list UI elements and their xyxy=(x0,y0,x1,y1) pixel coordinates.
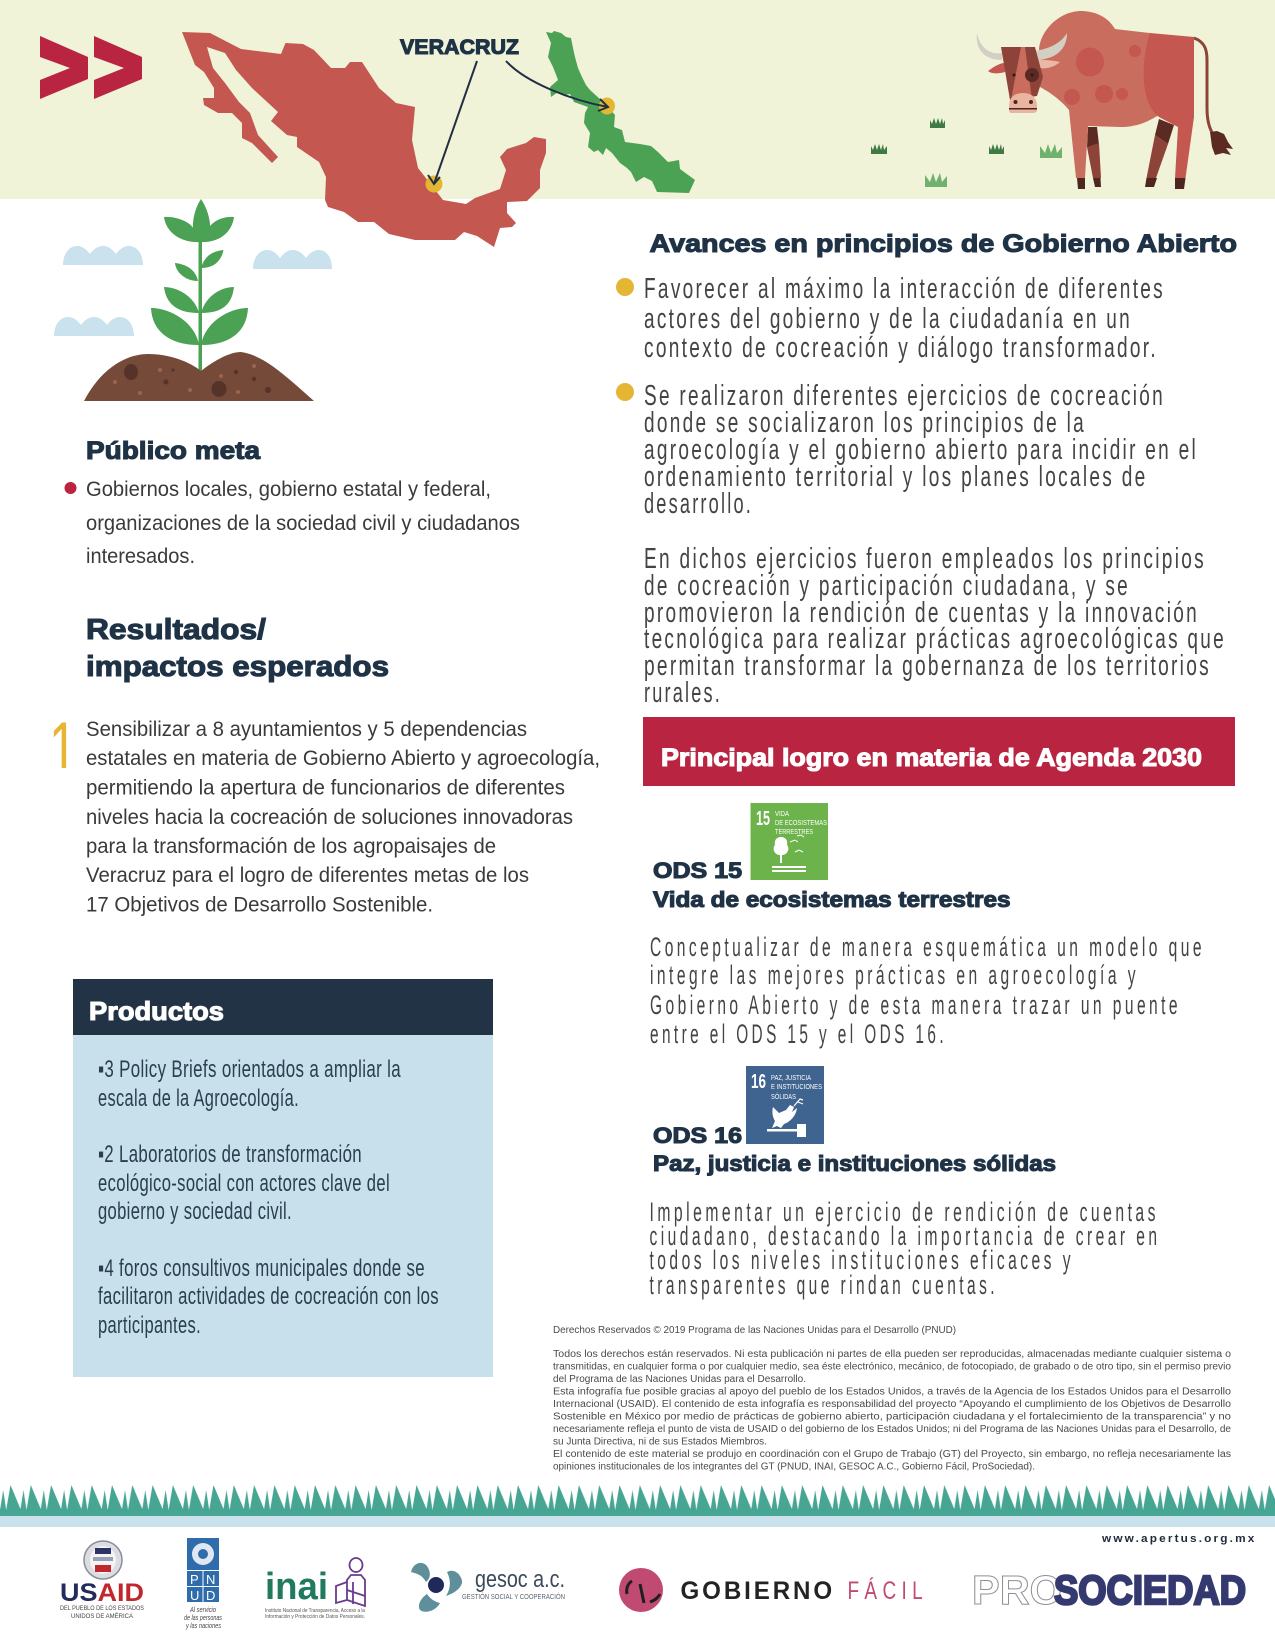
text: expected result: niveles hacia la cocreación de soluciones innovadoras xyxy=(86,806,573,829)
heading: Resultados / impactos esperados: impactos esperados xyxy=(86,651,389,683)
product list: ecológico-social con actores clave del xyxy=(98,1170,390,1197)
illustration: cow xyxy=(977,11,1233,189)
legal text: Todos los derechos están reservados. Ni esta publicación ni partes de ella pueden ser reproducidas, almacenadas mediante cualquier sistema o xyxy=(553,1349,1231,1360)
logo: PNUD: U xyxy=(190,1588,199,1603)
heading: Público meta: Público meta xyxy=(86,437,261,465)
text: ODS 15 description: entre el ODS 15 y el ODS 16. xyxy=(650,1019,947,1049)
icon: SDG 15 tile: TERRESTRES xyxy=(775,829,813,836)
text: target audience: Gobiernos locales, gobierno estatal y federal, xyxy=(86,478,491,501)
icon: SDG 15 tile: 15 xyxy=(756,808,770,830)
legal text: El contenido de este material se produjo en coordinación con el Grupo de Trabajo (GT) del Proyecto, sin embargo, no refleja necesariamente las xyxy=(553,1449,1231,1460)
logo: GESOC: gesoc a.c. xyxy=(475,1566,565,1593)
icon: SDG 16 tile: E INSTITUCIONES xyxy=(771,1084,822,1091)
legal text: transmitidas, en cualquier forma o por cualquier medio, sea éste electrónico, mecánico, de fotocopiado, de grabado o de otro tipo, sin el permiso previo xyxy=(553,1362,1231,1372)
arrow to Mexico map xyxy=(428,61,477,184)
header band xyxy=(0,0,1275,199)
legal text: del Programa de las Naciones Unidas para el Desarrollo. xyxy=(553,1374,806,1385)
label: ODS 16: ODS 16 xyxy=(653,1123,742,1148)
text: expected result: estatales en materia de Gobierno Abierto y agroecología, xyxy=(86,747,600,770)
text: expected result: 17 Objetivos de Desarrollo Sostenible. xyxy=(86,894,433,916)
panel: Productos xyxy=(73,979,493,1377)
text: first principle xyxy=(644,273,1165,364)
banner: Principal logro en materia de Agenda 2030: Principal logro en materia de Agenda 2030 xyxy=(661,744,1202,772)
legal text: su Junta Directiva, ni de sus Estados Miembros. xyxy=(553,1436,767,1448)
icon: SDG 16 tile: PAZ, JUSTICIA xyxy=(771,1075,811,1082)
product list: gobierno y sociedad civil. xyxy=(98,1198,292,1225)
logo: USAID: DEL PUEBLO DE LOS ESTADOS xyxy=(60,1605,145,1612)
logo: USAID xyxy=(60,1541,145,1620)
logo: ProSociedad: PRO xyxy=(972,1567,1062,1613)
logo: ProSociedad: SOCIEDAD xyxy=(1054,1567,1246,1613)
text: expected result: Veracruz para el logro de diferentes metas de los xyxy=(86,864,529,887)
grass band xyxy=(0,1485,1275,1527)
heading: Resultados / impactos esperados: Resultados/ xyxy=(86,614,266,646)
label: ODS 15: ODS 15 xyxy=(653,858,742,883)
panel heading: Productos xyxy=(89,996,224,1026)
product list: facilitaron actividades de cocreación con los xyxy=(98,1283,439,1310)
icon: SDG 16 tile: SÓLIDAS xyxy=(771,1092,796,1101)
arrow to Veracruz map xyxy=(506,61,608,111)
bullets: yellow dots xyxy=(616,278,634,401)
legal text: Derechos Reservados © 2019 Programa de las Naciones Unidas para el Desarrollo (PNUD) xyxy=(553,1325,956,1336)
product list xyxy=(98,1056,439,1339)
text: expected result xyxy=(86,718,600,916)
text: target audience xyxy=(86,478,520,568)
text: target audience: interesados. xyxy=(86,545,195,568)
logo: PNUD xyxy=(184,1538,222,1630)
logo: GESOC xyxy=(411,1563,565,1612)
text: ODS 16 description xyxy=(650,1197,1160,1300)
legal text: necesariamente refleja el punto de vista de USAID o del gobierno de los Estados Unidos; ni del Programa de las Naciones Unidas para el Desarrollo, de xyxy=(553,1424,1231,1435)
product list: participantes. xyxy=(98,1312,201,1339)
icon: double chevron xyxy=(40,36,142,99)
location markers xyxy=(426,98,615,192)
legal text: Esta infografía fue posible gracias al apoyo del pueblo de los Estados Unidos, a través de la Agencia de los Estados Unidos para el Desarrollo xyxy=(553,1386,1231,1398)
clouds xyxy=(54,246,332,336)
bullet: red dot xyxy=(64,482,76,494)
subheading: Paz, justicia e instituciones sólidas: Paz, justicia e instituciones sólidas xyxy=(653,1151,1056,1176)
logo: PNUD: P xyxy=(190,1572,199,1587)
text: expected result: permitiendo la apertura de funcionarios de diferentes xyxy=(86,776,565,800)
text: expected result: Sensibilizar a 8 ayuntamientos y 5 dependencias xyxy=(86,718,527,741)
product list: ▪4 foros consultivos municipales donde se xyxy=(98,1255,425,1282)
logo: USAID: UNIDOS DE AMÉRICA xyxy=(71,1611,134,1620)
text: second principle: desarrollo. xyxy=(644,488,753,520)
text: third paragraph xyxy=(644,543,1226,709)
website url: www.apertus.org.mx xyxy=(1101,1533,1256,1545)
text: expected result: para la transformación de los agropaisajes de xyxy=(86,835,496,858)
logo: Gobierno Fácil xyxy=(619,1568,928,1612)
icon: SDG 16 tile xyxy=(746,1066,824,1144)
logo: INAI: Instituto Nacional de Transparencia, Acceso a la xyxy=(265,1608,365,1614)
grass tufts xyxy=(871,118,1062,187)
icon: SDG 15 tile: VIDA xyxy=(775,811,789,818)
legal text xyxy=(553,1325,1231,1472)
map of Veracruz xyxy=(546,31,695,193)
text: ODS 15 description xyxy=(650,932,1205,1049)
heading: Avances en principios de Gobierno Abierto: Avances en principios de Gobierno Abierto xyxy=(650,230,1237,258)
subheading: Vida de ecosistemas terrestres: Vida de ecosistemas terrestres xyxy=(653,887,1010,912)
product list: escala de la Agroecología. xyxy=(98,1085,299,1112)
logo: PNUD: D xyxy=(206,1588,215,1603)
illustration: plant and soil xyxy=(84,199,314,401)
icon: SDG 15 tile xyxy=(750,803,828,880)
logo: INAI: Información y Protección de Datos Personales. xyxy=(265,1614,365,1620)
heading: Resultados / impactos esperados xyxy=(86,614,389,683)
logo: GESOC: GESTIÓN SOCIAL Y COOPERACIÓN xyxy=(462,1592,565,1601)
legal text: Internacional (USAID). El contenido de esta infografía es responsabilidad del proyecto “Apoyando el cumplimiento de los Objetivos de Desarrollo xyxy=(553,1399,1231,1410)
logo: Gobierno Fácil: FÁCIL xyxy=(848,1576,928,1605)
logo: INAI: inai xyxy=(265,1566,328,1608)
logo: Gobierno Fácil: GOBIERNO xyxy=(680,1577,835,1605)
legal text: opiniones institucionales de los integrantes del GT (PNUD, INAI, GESOC A.C., Gobierno Fácil, ProSociedad). xyxy=(553,1462,1035,1472)
label: Veracruz: VERACRUZ xyxy=(400,36,519,59)
map of Mexico xyxy=(182,32,546,247)
banner: Principal logro en materia de Agenda 2030 xyxy=(643,717,1235,786)
logo: PNUD: y las naciones xyxy=(185,1623,221,1630)
logo: PNUD: N xyxy=(206,1572,215,1587)
product list: ▪2 Laboratorios de transformación xyxy=(98,1141,362,1168)
logo: INAI xyxy=(265,1558,365,1620)
icon: SDG 15 tile: DE ECOSISTEMAS xyxy=(775,820,827,827)
logo: PNUD: de las personas xyxy=(184,1615,222,1622)
text: third paragraph: rurales. xyxy=(644,677,722,709)
logo: PNUD: Al servicio xyxy=(189,1607,216,1614)
logo: USAID: USAID xyxy=(60,1579,144,1607)
number one: 1 xyxy=(49,707,77,792)
icon: SDG 16 tile: 16 xyxy=(751,1071,766,1093)
text: ODS 16 description: transparentes que rindan cuentas. xyxy=(650,1270,998,1300)
product list: ▪3 Policy Briefs orientados a ampliar la xyxy=(98,1056,401,1083)
text: target audience: organizaciones de la sociedad civil y ciudadanos xyxy=(86,512,520,535)
logo: ProSociedad xyxy=(972,1567,1246,1613)
text: second principle xyxy=(644,380,1198,520)
legal text: Sostenible en México por medio de prácticas de gobierno abierto, participación ciudadana y el fortalecimiento de la transparencia” y no xyxy=(553,1412,1231,1422)
